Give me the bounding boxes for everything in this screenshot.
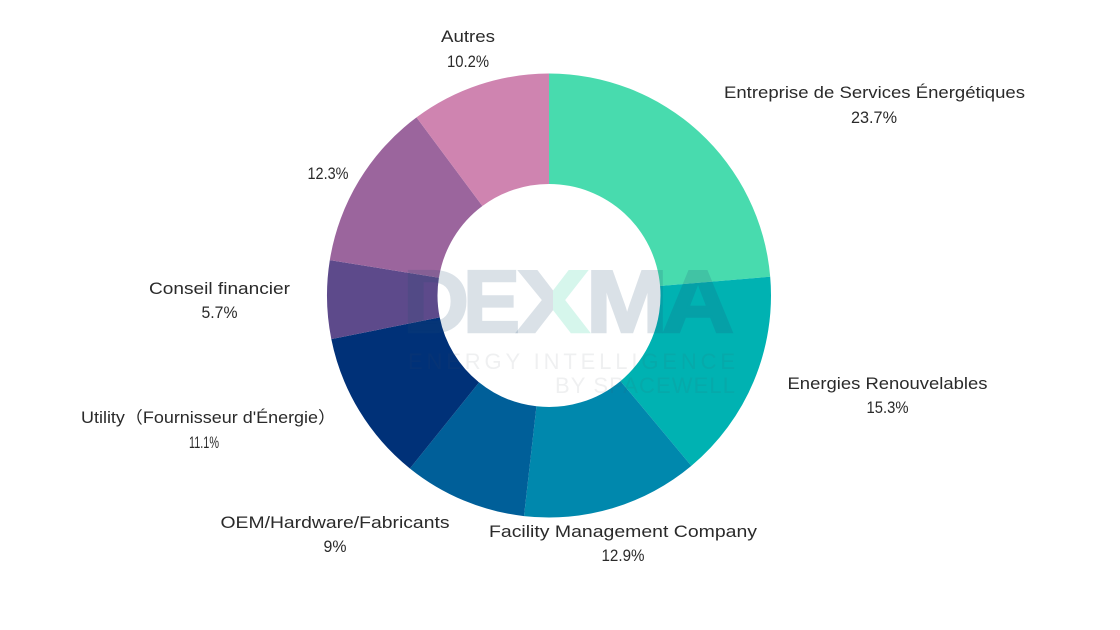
label: Utility (Fournisseur d'Énergie) bbox=[81, 408, 336, 452]
label: Facility Management Company: 12.9% bbox=[602, 547, 645, 565]
segment: Conseil financier 5.7% bbox=[327, 260, 440, 339]
label: Facility Management Company bbox=[489, 523, 758, 565]
label: Energies Renouvelables: 15.3% bbox=[866, 399, 909, 417]
label: Utility (Fournisseur d'Énergie): Utility（Fournisseur d'Énergie） bbox=[81, 408, 336, 427]
label: 12.3%: 12.3% bbox=[308, 165, 349, 183]
segment: Facility Management Company 12.9% bbox=[524, 381, 691, 518]
segment: Energies Renouvelables 15.3% bbox=[621, 277, 771, 466]
label: Energies Renouvelables bbox=[788, 375, 988, 417]
segment: OEM/Hardware/Fabricants 9% bbox=[410, 382, 536, 516]
segment: Autres 10.2% bbox=[417, 74, 549, 206]
label: Autres: 10.2% bbox=[447, 53, 489, 71]
watermark subline: BY SPACEWELL bbox=[555, 373, 735, 398]
label: Autres bbox=[441, 28, 495, 71]
watermark wordmark: A bbox=[662, 252, 734, 351]
label: Utility (Fournisseur d'Énergie): 11.1% bbox=[189, 434, 219, 452]
donut chart with labels and watermark bbox=[82, 30, 1024, 561]
watermark tagline: ENERGY INTELLIGENCE bbox=[408, 349, 735, 374]
segment: Entreprise de Services Énergétiques 23.7% bbox=[549, 74, 770, 286]
label: Energies Renouvelables: Energies Renouvelables bbox=[788, 375, 988, 393]
segment: Utility 11.1% bbox=[331, 317, 479, 468]
watermark wordmark: M bbox=[586, 252, 668, 351]
label: Entreprise de Services Énergétiques: Entreprise de Services Énergétiques bbox=[724, 83, 1025, 102]
watermark wordmark: X bbox=[517, 252, 589, 351]
label: Conseil financier: Conseil financier bbox=[149, 280, 291, 298]
label: Autres: Autres bbox=[441, 28, 495, 46]
label: OEM/Hardware/Fabricants bbox=[220, 514, 450, 556]
label: Entreprise de Services Énergétiques bbox=[724, 83, 1025, 127]
label: Entreprise de Services Énergétiques: 23.7% bbox=[851, 109, 897, 127]
label: Facility Management Company: Facility Management Company bbox=[489, 523, 758, 541]
segment: unnamed 12.3% bbox=[330, 117, 482, 278]
watermark wordmark bbox=[408, 270, 733, 334]
watermark: DEXMA logo bbox=[408, 270, 734, 393]
watermark wordmark: D bbox=[403, 252, 469, 351]
watermark wordmark: E bbox=[463, 252, 520, 351]
label: Conseil financier bbox=[149, 280, 291, 322]
label: OEM/Hardware/Fabricants: OEM/Hardware/Fabricants bbox=[220, 514, 450, 532]
watermark wordmark: X bbox=[517, 252, 589, 351]
label: Conseil financier: 5.7% bbox=[202, 304, 238, 322]
donut chart bbox=[327, 74, 771, 518]
label: OEM/Hardware/Fabricants: 9% bbox=[324, 538, 347, 556]
